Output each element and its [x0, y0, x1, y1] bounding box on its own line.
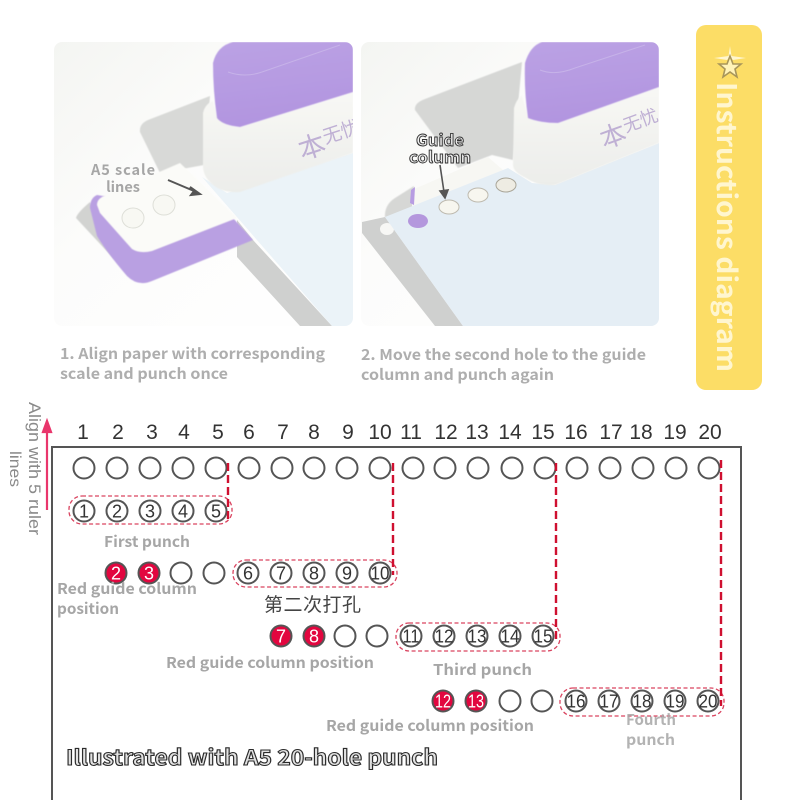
ruler numbers: 4 — [178, 421, 190, 444]
label: A5 scale lines: lines — [106, 176, 140, 197]
third punch row: 15 — [534, 626, 552, 646]
ruler numbers — [77, 421, 722, 444]
white plate — [97, 163, 237, 252]
first punch group: 4 — [178, 502, 188, 522]
red dashed guide lines — [228, 460, 721, 706]
purple punch top — [213, 42, 353, 127]
icon: star — [714, 46, 746, 77]
ruler numbers: 6 — [243, 421, 255, 444]
third punch row: 13 — [468, 626, 486, 646]
label: fourth punch: punch — [626, 729, 675, 750]
label: First punch: First punch — [104, 531, 190, 552]
white punch body — [513, 87, 659, 185]
second punch row: 9 — [342, 564, 352, 584]
ruler numbers: 7 — [277, 421, 289, 444]
label: red guide column position 1: position — [57, 598, 119, 619]
purple punch top — [525, 42, 659, 123]
note: illustrated with A5 20-hole punch: Illustrated with A5 20-hole punch — [66, 742, 438, 772]
arrow: to scale line — [168, 180, 200, 195]
punch shadow — [415, 62, 522, 168]
label: red guide column position 1: Red guide column — [57, 578, 197, 599]
ruler numbers: 3 — [146, 421, 158, 444]
fourth punch row: 20 — [698, 692, 718, 712]
label: A5 scale lines — [90, 159, 155, 197]
label: Guide column — [409, 127, 471, 168]
label: second punch: 第二次打孔 — [264, 590, 361, 617]
white punch body — [203, 92, 353, 192]
banner title: Instructions diagram — [709, 82, 748, 372]
step 2 caption: 2. Move the second hole to the guide — [361, 344, 646, 365]
first punch group: 5 — [211, 502, 221, 522]
arrow: to guide column — [440, 165, 448, 198]
photo background — [361, 42, 492, 166]
first punch group: 1 — [79, 502, 89, 522]
ruler numbers: 15 — [531, 421, 555, 444]
punch shadow — [140, 96, 210, 173]
red guide holes — [106, 562, 160, 584]
hole in shadow — [380, 223, 394, 235]
button 2 — [153, 195, 175, 215]
ruler numbers: 13 — [465, 421, 489, 444]
ruler alignment note: lines — [6, 451, 23, 487]
punch top highlight — [540, 45, 645, 73]
red guide holes: 13 — [468, 692, 484, 712]
purple base — [90, 195, 253, 283]
ruler numbers: 5 — [212, 421, 224, 444]
red guide holes: 2 — [111, 564, 121, 584]
third punch row: 14 — [500, 626, 520, 646]
fourth punch row: 19 — [666, 692, 684, 712]
button 1 — [122, 208, 144, 228]
paper shadow — [362, 217, 463, 326]
ruler numbers: 19 — [663, 421, 687, 444]
ruler alignment note: Align with 5 ruler — [25, 402, 44, 535]
punch logo: 本 — [594, 113, 631, 157]
paper shadow — [237, 220, 332, 326]
second punch row — [106, 560, 397, 587]
punched hole: guide column — [439, 200, 459, 214]
ruler numbers: 11 — [400, 421, 422, 444]
label: red guide column position 1 — [57, 578, 197, 619]
ruler numbers: 8 — [308, 421, 320, 444]
blue paper — [202, 153, 353, 326]
first punch group: 3 — [145, 502, 155, 522]
label: red guide column position 2: Red guide column position — [166, 652, 374, 673]
ruler numbers: 16 — [564, 421, 588, 444]
label: Guide column: Guide — [416, 127, 464, 151]
arrow: alignment up — [43, 421, 51, 510]
fourth punch row: 18 — [632, 692, 652, 712]
label: Guide column: column — [409, 144, 471, 168]
ruler alignment note — [6, 402, 44, 535]
red guide holes: 7 — [276, 626, 286, 646]
fourth punch row: 16 — [566, 692, 586, 712]
ruler numbers: 14 — [498, 421, 522, 444]
punch logo: 无忧 — [619, 101, 662, 138]
step 1 caption: scale and punch once — [60, 363, 228, 384]
ruler numbers: 9 — [342, 421, 354, 444]
banner background — [696, 25, 762, 390]
white plate — [412, 157, 503, 207]
ruler numbers: 17 — [599, 421, 623, 444]
label: fourth punch — [626, 709, 676, 750]
red guide holes: 8 — [309, 626, 319, 646]
second punch row: 6 — [243, 564, 253, 584]
punched hole: purple — [408, 214, 428, 228]
paper frame — [52, 447, 741, 800]
punched hole: second — [468, 188, 488, 202]
panel: instructions banner — [696, 25, 762, 390]
plate shadow — [385, 186, 414, 218]
panel: step 2 photo — [361, 42, 665, 326]
photo background — [54, 42, 186, 166]
red guide holes — [432, 690, 486, 712]
label: A5 scale lines: A5 scale — [90, 159, 155, 180]
top row of 20 holes — [74, 458, 720, 478]
red guide holes: 3 — [144, 564, 154, 584]
ruler numbers: 1 — [77, 421, 89, 444]
step 2 caption: column and punch again — [361, 364, 554, 385]
third punch row: 12 — [434, 626, 454, 646]
label: fourth punch: Fourth — [626, 709, 676, 730]
second punch row: 10 — [370, 564, 390, 584]
label: red guide column position 3: Red guide column position — [326, 715, 534, 736]
fourth punch row — [432, 688, 724, 716]
ruler numbers: 2 — [112, 421, 124, 444]
base shadow — [76, 202, 110, 254]
second punch row: 7 — [276, 564, 286, 584]
fourth punch row: 17 — [600, 692, 618, 712]
step 2 caption — [361, 344, 646, 385]
second punch row: 8 — [309, 564, 319, 584]
punch top highlight — [228, 45, 340, 75]
label: third punch: Third punch — [433, 659, 532, 680]
ruler numbers: 20 — [698, 421, 722, 444]
third punch row — [270, 623, 560, 651]
first punch group: 2 — [112, 502, 122, 522]
punched hole: third — [496, 178, 516, 192]
step 1 caption: 1. Align paper with corresponding — [60, 343, 325, 364]
ruler numbers: 12 — [434, 421, 458, 444]
punch logo: 无忧 — [319, 112, 363, 150]
third punch row: 11 — [402, 626, 420, 646]
ruler numbers: 18 — [629, 421, 653, 444]
red guide holes — [270, 626, 324, 646]
first punch group — [69, 496, 232, 524]
punch logo: 本 — [292, 122, 330, 168]
purple sliver — [410, 187, 415, 205]
step 1 caption — [60, 343, 325, 384]
blue paper — [385, 143, 659, 326]
panel: step 1 photo — [54, 42, 366, 326]
red guide holes: 12 — [435, 692, 451, 712]
ruler numbers: 10 — [368, 421, 392, 444]
